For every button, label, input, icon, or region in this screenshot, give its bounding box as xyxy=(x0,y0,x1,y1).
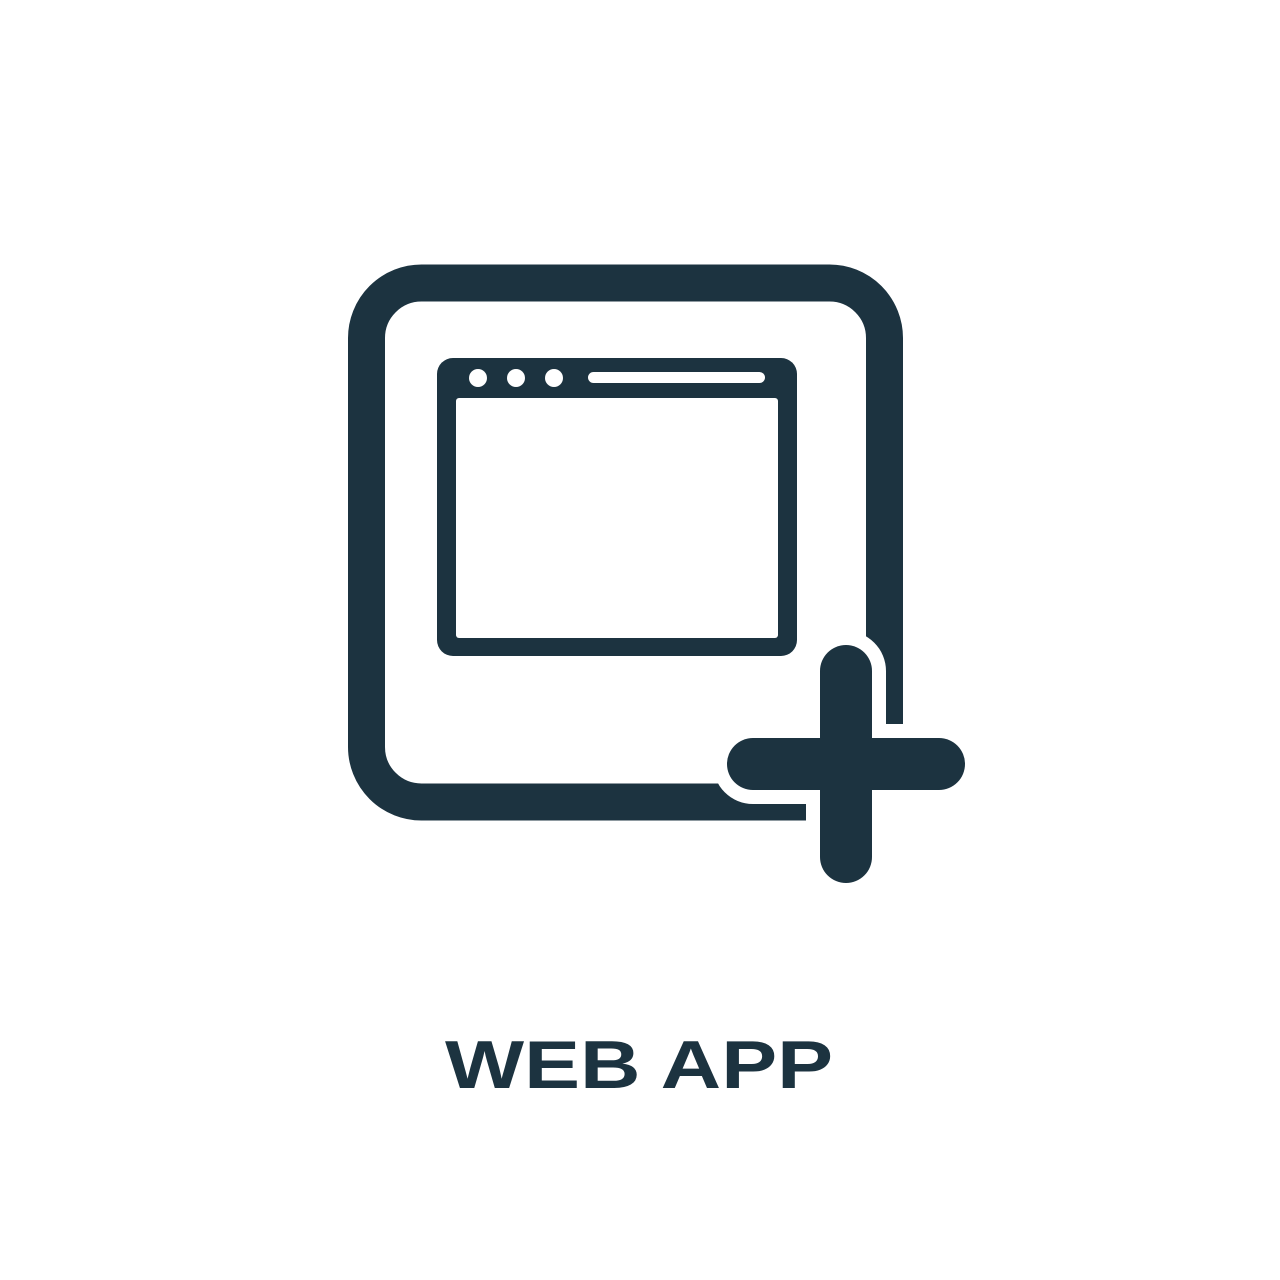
icon: plus sign xyxy=(753,671,939,857)
icon: browser window xyxy=(437,358,797,656)
icon frame: rounded square xyxy=(366,283,884,802)
title: WEB APP: WEB APP xyxy=(445,1027,833,1103)
icon: web app xyxy=(366,283,939,857)
